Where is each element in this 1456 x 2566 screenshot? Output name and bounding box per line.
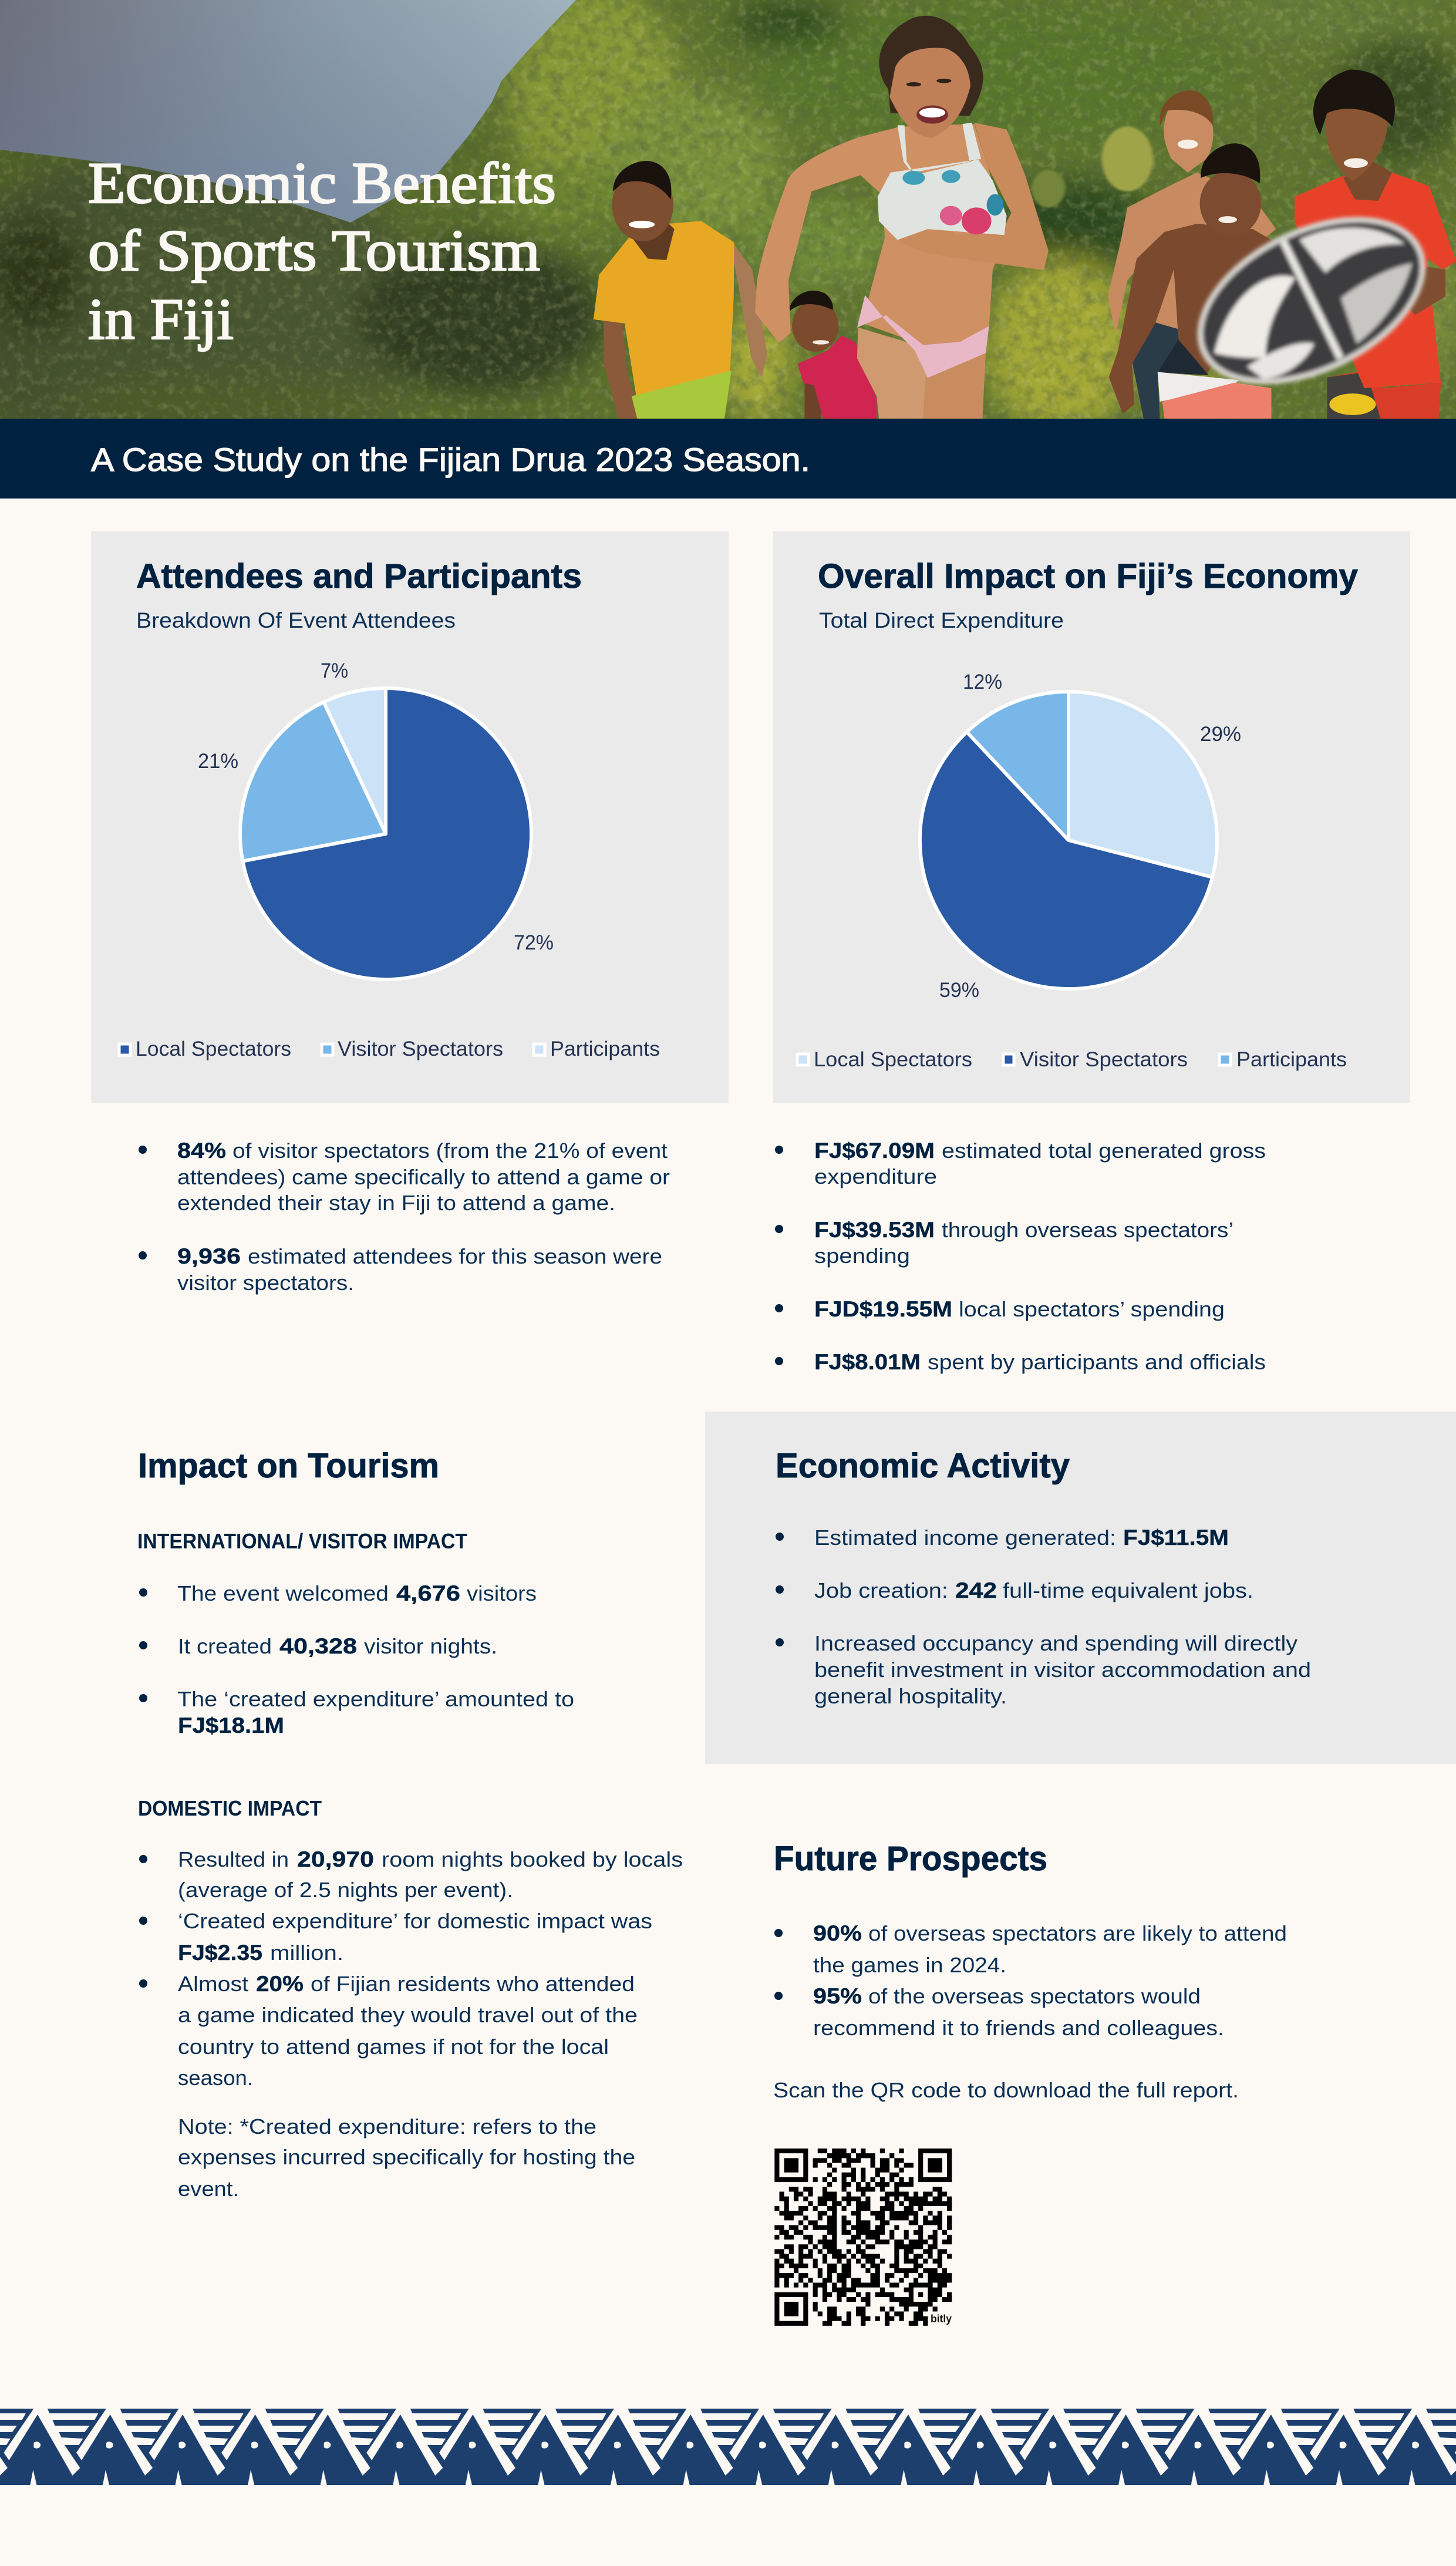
prospects list: of overseas spectators are likely to attend — [868, 1921, 1287, 1945]
domestic list: million. — [270, 1941, 343, 1965]
expenditure facts list: expenditure — [814, 1164, 937, 1188]
pie labels: 12% — [963, 671, 1002, 693]
legend — [119, 1038, 660, 1060]
subheading: INTERNATIONAL/ VISITOR IMPACT — [137, 1529, 467, 1553]
expenditure facts list — [775, 1139, 1266, 1374]
attendee facts list: 9,936 — [177, 1244, 241, 1268]
pie labels — [939, 671, 1241, 1002]
heading: Attendees and Participants — [136, 557, 582, 595]
palm trees — [1032, 127, 1153, 207]
domestic list — [139, 1847, 683, 2090]
attendee facts list — [139, 1139, 670, 1295]
QR instruction: Scan the QR code to download the full report. — [773, 2078, 1239, 2102]
domestic list: ‘Created expenditure’ for domestic impact was — [178, 1909, 652, 1933]
domestic list: season. — [178, 2066, 253, 2090]
person: small boy in pink shirt — [788, 291, 877, 419]
section: impact on tourism, international — [137, 1447, 574, 1737]
pie labels: 7% — [321, 659, 348, 682]
heading: Overall Impact on Fiji’s Economy — [818, 557, 1358, 595]
expenditure facts list: local spectators’ spending — [959, 1297, 1225, 1321]
visitor list — [139, 1581, 574, 1737]
economic list — [776, 1526, 1311, 1708]
domestic list: a game indicated they would travel out of the — [178, 2003, 638, 2027]
subheading: Breakdown Of Event Attendees — [136, 608, 456, 632]
expenditure facts list: spending — [814, 1244, 910, 1268]
visitor list: 4,676 — [396, 1581, 460, 1605]
panel: overall impact on Fiji's economy — [773, 531, 1410, 1103]
domestic list: FJ$2.35 — [178, 1941, 262, 1965]
legend: Local Spectators — [814, 1048, 972, 1071]
domestic list: Almost — [178, 1972, 248, 1996]
economic list: Job creation: — [814, 1578, 948, 1602]
panel: economic activity — [705, 1412, 1456, 1764]
hero title: in Fiji — [88, 287, 234, 352]
rugby ball — [1170, 183, 1452, 419]
prospects list: recommend it to friends and colleagues. — [813, 2016, 1224, 2040]
subtitle band: A Case Study on the Fijian Drua 2023 Season. — [91, 441, 810, 478]
visitor list: visitor nights. — [364, 1634, 497, 1658]
economic list: general hospitality. — [814, 1684, 1007, 1708]
note — [178, 2114, 635, 2201]
visitor list: The ‘created expenditure’ amounted to — [177, 1687, 574, 1711]
pie labels: 59% — [939, 979, 979, 1002]
subheading: Total Direct Expenditure — [819, 608, 1064, 632]
economic list: 242 — [955, 1578, 997, 1602]
economic list: Increased occupancy and spending will directly — [814, 1631, 1297, 1655]
legend: Participants — [1236, 1048, 1347, 1071]
prospects list: the games in 2024. — [813, 1953, 1006, 1977]
person: child in red shirt — [1295, 69, 1456, 419]
visitor list: visitors — [467, 1581, 537, 1605]
visitor list: FJ$18.1M — [178, 1713, 284, 1737]
legend: Participants — [550, 1038, 660, 1060]
section: future prospects — [773, 1840, 1287, 2102]
legend — [797, 1048, 1347, 1071]
sky — [0, 0, 576, 223]
mountains — [0, 0, 1456, 458]
prospects list: 95% — [813, 1984, 862, 2008]
person: shirtless boy — [1109, 143, 1276, 419]
bitly mark: bitly — [931, 2313, 952, 2325]
economic list: benefit investment in visitor accommodation and — [814, 1658, 1311, 1682]
pie chart: event attendees — [240, 688, 531, 979]
domestic list: 20,970 — [297, 1847, 374, 1871]
person: boy in yellow shirt — [594, 161, 767, 419]
visitor list: It created — [178, 1634, 272, 1658]
legend: Visitor Spectators — [1020, 1048, 1188, 1071]
heading: Impact on Tourism — [138, 1447, 439, 1485]
decorative masi pattern band — [0, 2409, 1456, 2485]
hero title — [88, 150, 556, 352]
QR code — [774, 2149, 952, 2326]
visitor list: The event welcomed — [177, 1581, 389, 1605]
note: Note: *Created expenditure: refers to the — [178, 2114, 596, 2139]
pie labels: 29% — [1200, 723, 1241, 746]
economic list: full-time equivalent jobs. — [1003, 1578, 1253, 1602]
section: domestic impact — [138, 1796, 683, 2201]
attendee facts list: extended their stay in Fiji to attend a game. — [177, 1191, 615, 1215]
economic list: FJ$11.5M — [1123, 1526, 1229, 1550]
domestic list: Resulted in — [178, 1847, 289, 1871]
panel: attendees and participants — [91, 531, 729, 1103]
attendee facts list: 84% — [177, 1139, 226, 1163]
economic list: Estimated income generated: — [814, 1526, 1116, 1550]
hero title: of Sports Tourism — [88, 218, 540, 283]
person: man laughing behind — [1108, 90, 1276, 419]
pie labels: 21% — [198, 750, 238, 773]
hero photo: children running with rugby ball on a green mountainside — [0, 0, 1456, 458]
expenditure facts list: FJD$19.55M — [814, 1297, 952, 1321]
hero title: Economic Benefits — [88, 150, 556, 215]
prospects list — [774, 1921, 1287, 2040]
legend: Local Spectators — [136, 1038, 291, 1060]
domestic list: 20% — [256, 1972, 304, 1996]
attendee facts list: attendees) came specifically to attend a game or — [177, 1165, 670, 1189]
prospects list: 90% — [813, 1921, 862, 1945]
subheading: DOMESTIC IMPACT — [138, 1796, 322, 1820]
pie labels: 72% — [514, 931, 554, 954]
pie chart: total direct expenditure — [920, 692, 1217, 989]
expenditure facts list: FJ$67.09M — [814, 1139, 935, 1163]
person: girl in floral swimsuit — [755, 16, 1049, 419]
domestic list: room nights booked by locals — [382, 1847, 683, 1871]
attendee facts list: estimated attendees for this season were — [248, 1244, 662, 1268]
domestic list: country to attend games if not for the local — [178, 2035, 609, 2059]
expenditure facts list: FJ$39.53M — [814, 1218, 935, 1242]
pie labels — [198, 659, 554, 954]
attendee facts list: visitor spectators. — [177, 1271, 354, 1295]
subtitle band — [0, 419, 1456, 499]
attendee facts list: of visitor spectators (from the 21% of event — [232, 1139, 668, 1163]
domestic list: (average of 2.5 nights per event). — [178, 1878, 513, 1902]
expenditure facts list: spent by participants and officials — [928, 1350, 1266, 1374]
domestic list: of Fijian residents who attended — [311, 1972, 635, 1996]
expenditure facts list: FJ$8.01M — [814, 1350, 921, 1374]
heading: Economic Activity — [776, 1447, 1070, 1485]
legend: Visitor Spectators — [338, 1038, 503, 1060]
expenditure facts list: through overseas spectators’ — [942, 1218, 1233, 1242]
note: event. — [178, 2177, 239, 2201]
prospects list: of the overseas spectators would — [868, 1984, 1201, 2008]
expenditure facts list: estimated total generated gross — [942, 1139, 1266, 1163]
note: expenses incurred specifically for hosting the — [178, 2145, 635, 2169]
heading: Future Prospects — [774, 1840, 1047, 1878]
visitor list: 40,328 — [279, 1634, 357, 1658]
